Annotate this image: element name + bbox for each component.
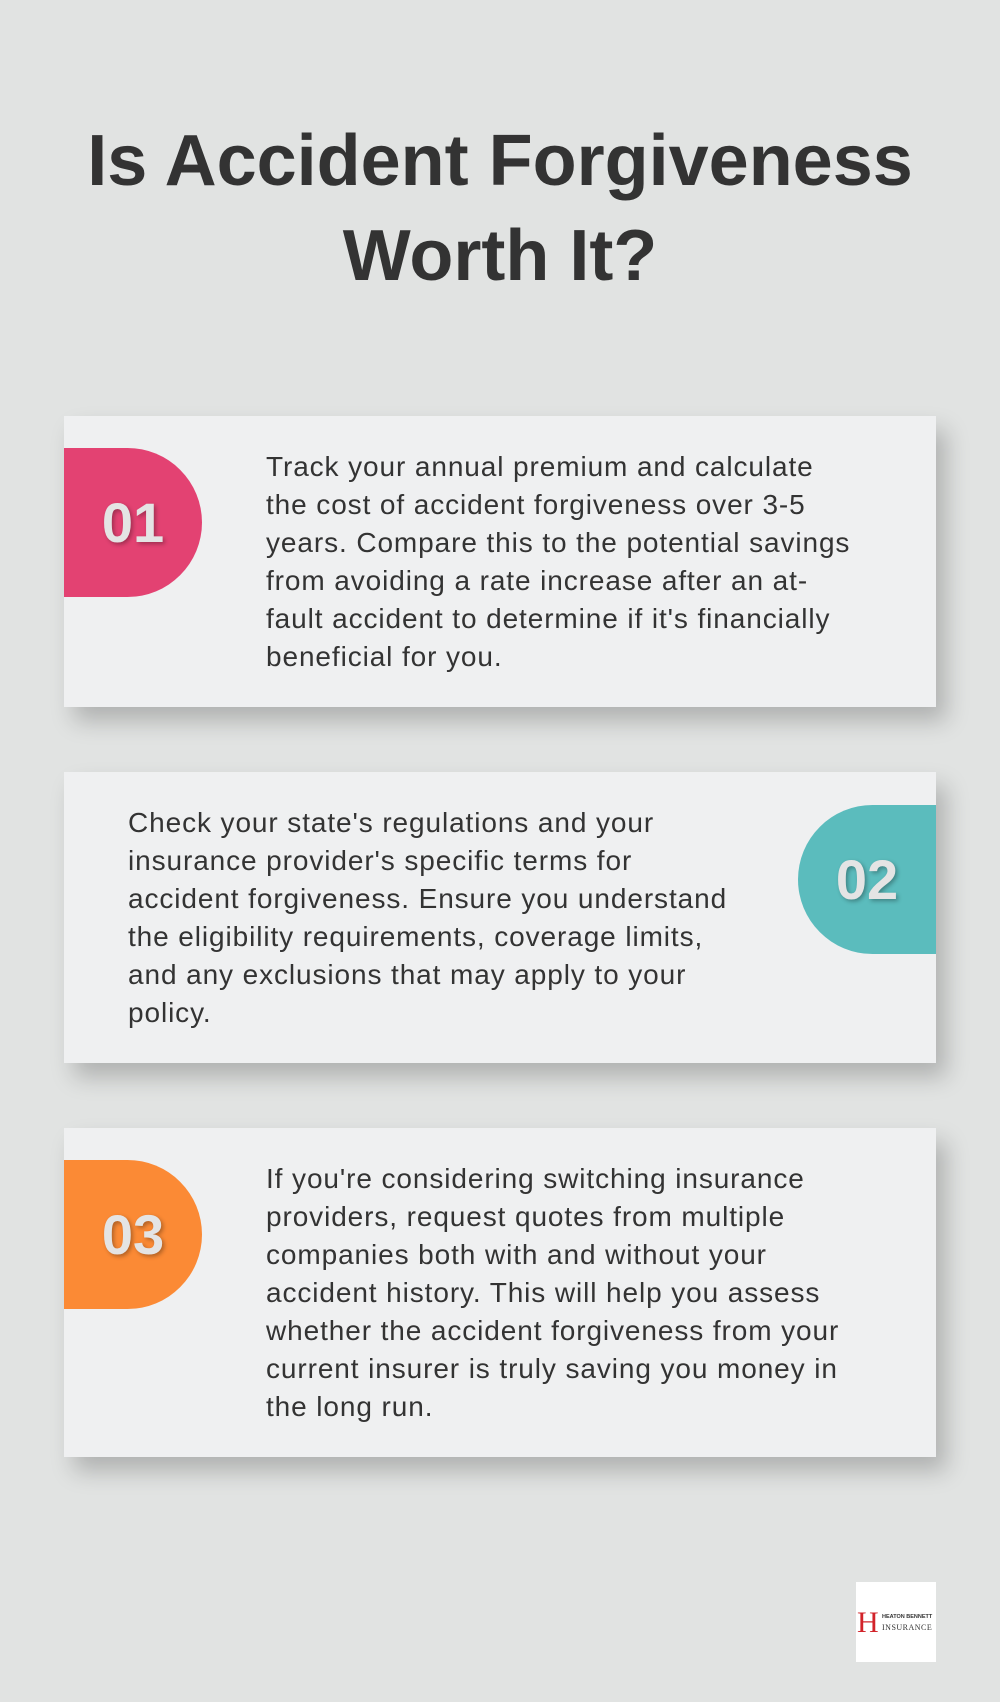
title: Worth It? [343,216,657,296]
logo [856,1582,936,1662]
panel: step 1 [64,416,936,707]
text 3: companies both with and without your [266,1239,767,1270]
logo: H [857,1606,879,1639]
text 3: providers, request quotes from multiple [266,1201,785,1232]
text 1: the cost of accident forgiveness over 3-5 [266,489,806,520]
text 2: accident forgiveness. Ensure you understand [128,883,727,914]
text 3 [266,1163,839,1422]
logo: INSURANCE [882,1623,932,1632]
badge 03 [64,1160,202,1309]
text 2: Check your state's regulations and your [128,807,654,838]
text 3: If you're considering switching insurance [266,1163,805,1194]
text 1: beneficial for you. [266,641,503,672]
text 1: from avoiding a rate increase after an at- [266,565,808,596]
badge 01: 01 [102,491,164,554]
text 3: whether the accident forgiveness from your [266,1315,839,1346]
panel: step 2 [64,772,936,1063]
text 1: Track your annual premium and calculate [266,451,814,482]
text 2: and any exclusions that may apply to your [128,959,686,990]
badge 02: 02 [836,848,898,911]
text 1: years. Compare this to the potential savings [266,527,850,558]
text 2: the eligibility requirements, coverage limits, [128,921,703,952]
text 3: accident history. This will help you assess [266,1277,820,1308]
logo: HEATON BENNETT [882,1614,932,1620]
text 3: the long run. [266,1391,433,1422]
badge 02 [798,805,936,954]
badge 03: 03 [102,1203,164,1266]
text 2 [128,807,727,1028]
badge 01 [64,448,202,597]
text 2: insurance provider's specific terms for [128,845,632,876]
title [87,121,913,296]
panel: step 3 [64,1128,936,1457]
title: Is Accident Forgiveness [87,121,913,201]
text 2: policy. [128,997,212,1028]
text 1 [266,451,850,672]
text 1: fault accident to determine if it's financially [266,603,830,634]
text 3: current insurer is truly saving you money in [266,1353,838,1384]
